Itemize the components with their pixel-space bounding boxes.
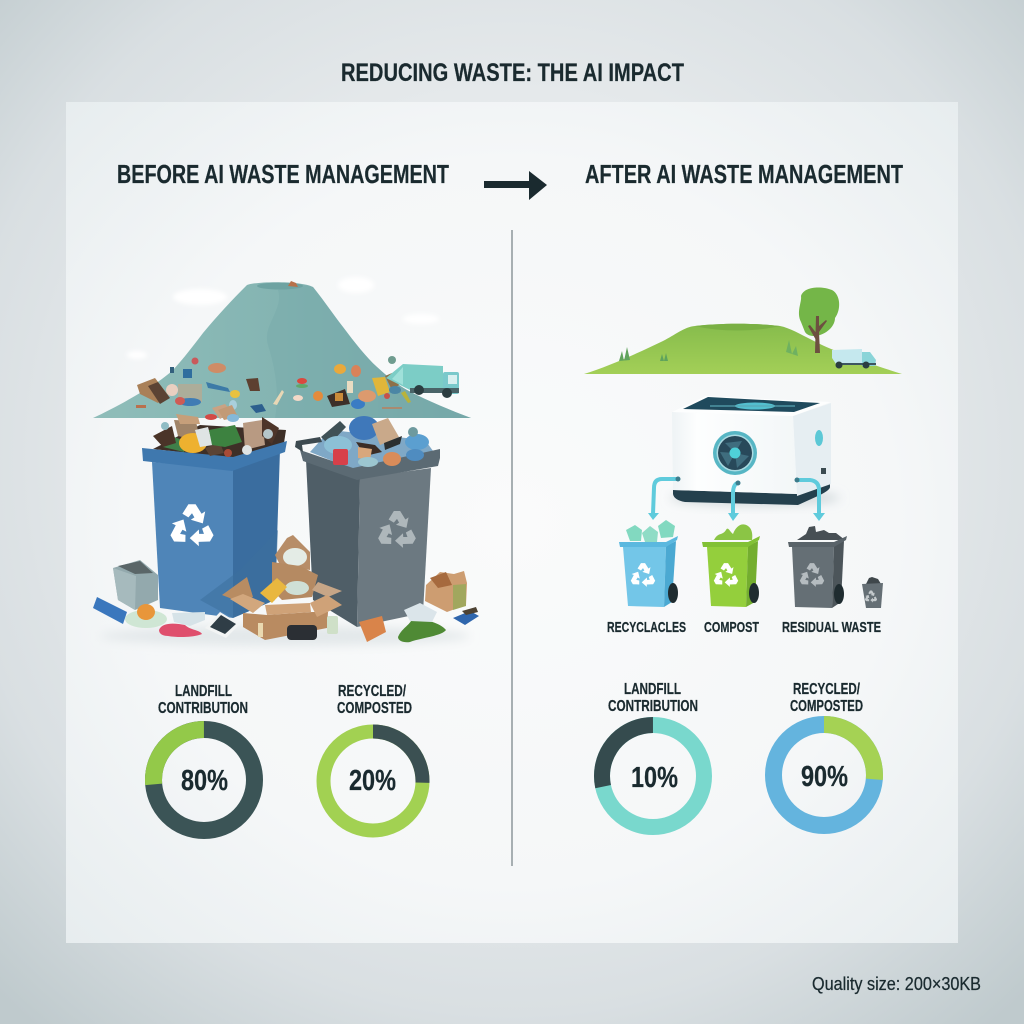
footer note: Quality size: 200×30KB	[812, 974, 981, 994]
chart: before landfill 80%: LANDFILL	[175, 683, 232, 700]
bin: recyclables	[619, 520, 678, 607]
pink splat	[159, 624, 202, 637]
chart: before landfill 80%: CONTRIBUTION	[158, 700, 248, 717]
small orange box	[359, 616, 386, 642]
fan	[713, 431, 757, 475]
blue recycling bin	[142, 425, 287, 618]
ground clutter	[93, 535, 479, 642]
gray bin	[295, 430, 440, 627]
panel: before illustration	[93, 277, 479, 646]
plate and shoe	[125, 610, 167, 628]
small truck	[832, 349, 876, 368]
paper bag	[425, 571, 467, 612]
AI sorting machine	[670, 396, 840, 506]
garbage truck	[386, 356, 459, 398]
tiny bin	[862, 577, 883, 608]
trash scattered on mountain	[136, 358, 411, 419]
chart: before landfill 80%	[149, 683, 259, 835]
bottle	[172, 612, 205, 626]
bin labels: RECYCLACLES	[607, 619, 686, 636]
chart: after landfill 10%: 10%	[631, 762, 678, 794]
recycling symbol	[797, 563, 826, 589]
back box	[275, 535, 310, 570]
heading: before: BEFORE AI WASTE MANAGEMENT	[117, 159, 449, 189]
bin labels: COMPOST	[704, 619, 759, 636]
green splat	[398, 619, 446, 642]
chart: after recycled 90%: COMPOSTED	[790, 698, 863, 715]
main panel	[66, 102, 958, 943]
arrow: before to after	[484, 171, 547, 200]
crumpled foil	[404, 603, 437, 622]
chart: before recycled 20%: RECYCLED/	[338, 683, 406, 700]
clouds	[127, 277, 439, 359]
bin: residual waste	[788, 526, 847, 608]
panel: after illustration	[584, 288, 902, 636]
appliance box	[113, 560, 158, 610]
recycling symbol	[374, 511, 418, 551]
ground shadow	[100, 626, 470, 646]
tree	[799, 288, 839, 353]
chart: after recycled 90%	[774, 681, 874, 826]
chart: before recycled 20%	[324, 683, 422, 830]
trash heap in gray bin	[321, 416, 429, 467]
chart: after recycled 90%: 90%	[801, 761, 848, 793]
chart: before recycled 20%: 20%	[349, 765, 396, 797]
blue roll	[93, 597, 127, 624]
tablet	[205, 612, 240, 638]
recycling symbol	[711, 563, 740, 589]
green landfill hill	[584, 324, 902, 374]
trash heap in blue bin	[153, 405, 279, 457]
bin: compost	[702, 524, 760, 607]
blue scrap	[453, 611, 479, 625]
landfill mountain	[93, 281, 471, 418]
bin labels: RESIDUAL WASTE	[782, 619, 881, 636]
chart: before landfill 80%: 80%	[181, 765, 228, 797]
title: REDUCING WASTE: THE AI IMPACT	[341, 59, 684, 87]
chart: after landfill 10%	[593, 681, 713, 836]
chart: after landfill 10%: LANDFILL	[624, 681, 681, 698]
recycling symbol	[628, 563, 657, 589]
chart: after landfill 10%: CONTRIBUTION	[608, 698, 698, 715]
cardboard box	[222, 562, 342, 640]
sorting arrows	[648, 476, 825, 521]
bin labels	[607, 619, 881, 636]
chart: after recycled 90%: RECYCLED/	[793, 681, 860, 698]
chart: before recycled 20%: COMPOSTED	[337, 700, 412, 717]
recycling symbol	[166, 504, 217, 550]
heading: after: AFTER AI WASTE MANAGEMENT	[585, 159, 903, 189]
